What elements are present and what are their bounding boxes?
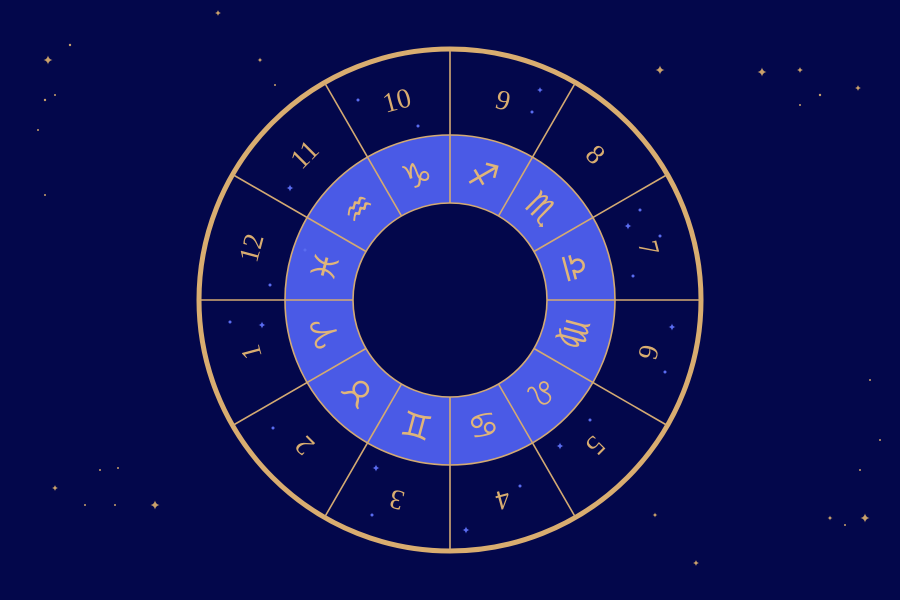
house numbers: 8 bbox=[579, 139, 611, 171]
zodiac signs: ♈︎ bbox=[303, 313, 349, 353]
outer house ring bbox=[199, 49, 701, 551]
zodiac signs: ♌︎ bbox=[516, 366, 566, 416]
house numbers: 4 bbox=[492, 482, 514, 516]
house numbers: 1 bbox=[235, 341, 269, 363]
divider lines bbox=[199, 49, 701, 551]
zodiac signs: ♍︎ bbox=[551, 313, 597, 353]
house numbers: 6 bbox=[631, 341, 665, 363]
zodiac signs: ♊︎ bbox=[397, 401, 437, 447]
zodiac signs: ♋︎ bbox=[463, 401, 503, 447]
zodiac signs: ♉︎ bbox=[334, 366, 384, 416]
zodiac wheel bbox=[199, 49, 701, 551]
zodiac signs: ♒︎ bbox=[334, 184, 384, 234]
zodiac signs bbox=[303, 153, 597, 447]
wheel stars bbox=[228, 87, 676, 534]
house numbers: 9 bbox=[492, 84, 514, 118]
zodiac signs: ♏︎ bbox=[516, 184, 566, 234]
house numbers: 3 bbox=[386, 482, 408, 516]
house numbers: 7 bbox=[631, 237, 665, 259]
zodiac signs: ♎︎ bbox=[551, 247, 597, 287]
house numbers bbox=[233, 82, 665, 516]
house numbers: 11 bbox=[285, 135, 325, 175]
house numbers: 5 bbox=[579, 429, 611, 461]
zodiac signs: ♑︎ bbox=[397, 153, 437, 199]
zodiac signs: ♓︎ bbox=[303, 247, 349, 287]
house numbers: 10 bbox=[379, 82, 415, 120]
house numbers: 12 bbox=[233, 230, 271, 266]
zodiac signs: ♐︎ bbox=[463, 153, 503, 199]
house numbers: 2 bbox=[289, 429, 321, 461]
inner circle bbox=[353, 203, 547, 397]
sign ring bbox=[285, 135, 615, 465]
